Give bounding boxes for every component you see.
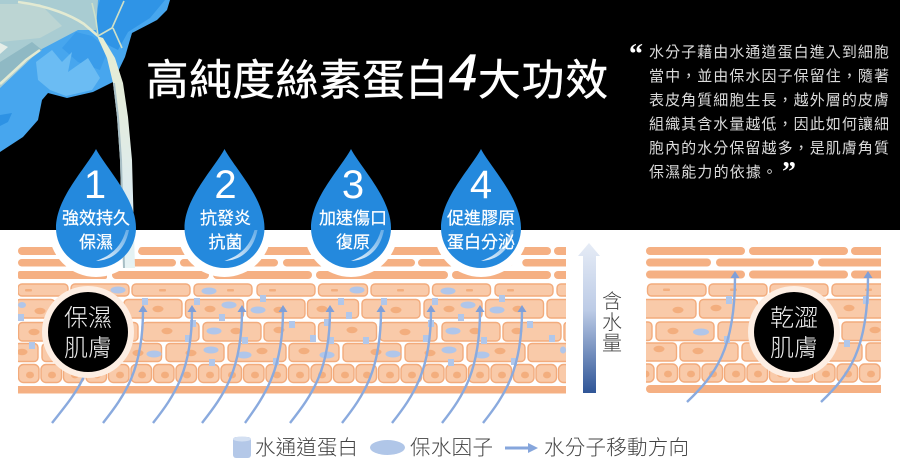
illustration: gloved hand pouring liquid from beaker <box>0 0 170 268</box>
skin diagram: dry skin <box>634 247 895 402</box>
legend label: moisture factor: 保水因子 <box>410 436 493 460</box>
droplet 1: long-lasting moisture <box>56 149 136 268</box>
water molecule arrows <box>687 271 872 402</box>
droplet 2: anti-inflammatory: 抗發炎 <box>200 209 251 228</box>
white halos under droplets <box>52 247 525 277</box>
title <box>146 44 608 105</box>
droplet 4: collagen secretion: 蛋白分泌 <box>447 233 515 252</box>
beaker <box>0 0 98 88</box>
body paragraph: 組織其含水量越低，因此如何讓細 <box>649 115 889 133</box>
droplet 4: collagen secretion: 促進膠原 <box>447 209 515 228</box>
droplet 3: wound healing: 復原 <box>336 233 370 252</box>
third cell row <box>18 322 572 341</box>
body paragraph: 當中，並由保水因子保留住，隨著 <box>649 68 889 85</box>
label: water content <box>602 290 622 355</box>
droplet 2: anti-inflammatory: 抗菌 <box>208 233 242 252</box>
clip cover for right edge <box>881 280 895 396</box>
beaker rims and glints <box>0 2 98 84</box>
legend icon: moisture factor <box>370 440 405 455</box>
stratum corneum layers <box>18 247 566 394</box>
droplet 1: long-lasting moisture: 保濕 <box>79 233 113 252</box>
badge: dry skin: 肌膚 <box>770 335 818 362</box>
closing quote mark: ” <box>782 157 796 188</box>
clip cover for left edge of cells <box>8 280 18 396</box>
badge: moisturized skin: 肌膚 <box>64 335 112 362</box>
black header band <box>0 0 900 230</box>
body paragraph: 保濕能力的依據。 <box>649 164 777 181</box>
glove lower shade <box>0 113 12 126</box>
basal cell row <box>18 364 570 382</box>
title: 4 <box>449 44 477 101</box>
title: 大功效 <box>478 58 608 105</box>
label: water content: 含 <box>602 290 622 313</box>
water channel proteins <box>724 296 869 347</box>
badge: moisturized skin: 保濕 <box>64 305 112 332</box>
body paragraph: 水分子藉由水通道蛋白進入到細胞 <box>649 44 889 61</box>
water content gradient arrow <box>578 243 600 393</box>
clip cover for left edge <box>634 280 646 396</box>
badge: dry skin <box>748 286 840 378</box>
moisture factors <box>18 286 566 358</box>
skin diagram: moisturized skin <box>8 247 576 423</box>
second cell row <box>16 300 571 318</box>
legend icon: water channel protein <box>233 436 251 458</box>
opening quote mark: “ <box>629 39 643 70</box>
label: water content: 水 <box>602 311 622 334</box>
stream shadow edge <box>113 83 125 268</box>
beaker lower shade <box>0 42 42 82</box>
droplet 3: wound healing <box>311 149 391 268</box>
glove upper fold <box>94 0 165 50</box>
droplet 1: long-lasting moisture: 強效持久 <box>62 209 130 228</box>
legend icon: arrow <box>505 443 538 453</box>
clip cover for right edge of cells <box>566 280 576 396</box>
body paragraph: 胞內的水分保留越多，是肌膚角質 <box>649 139 889 157</box>
droplet 2: anti-inflammatory <box>184 149 264 268</box>
flat cell row <box>18 284 571 296</box>
legend label: water channel protein: 水通道蛋白 <box>255 436 358 460</box>
body paragraph <box>649 44 889 181</box>
cell nuclei <box>16 289 551 378</box>
droplet 1: long-lasting moisture: 1 <box>84 163 106 207</box>
explanatory quote text <box>629 39 889 188</box>
glove centre fold <box>62 32 108 70</box>
cell rows <box>636 284 892 382</box>
body paragraph: 表皮角質細胞生長，越外層的皮膚 <box>649 91 889 109</box>
moisture factor <box>693 328 709 336</box>
title: 高純度絲素蛋白 <box>146 58 448 105</box>
droplet 4: collagen secretion <box>441 149 521 268</box>
droplet 3: wound healing: 加速傷口 <box>319 209 387 228</box>
beaker inner pale face <box>0 4 62 42</box>
badge: moisturized skin <box>42 286 134 378</box>
legend label: water movement direction: 水分子移動方向 <box>544 436 689 460</box>
liquid strands on lip <box>92 1 124 48</box>
beaker white glint <box>0 43 8 54</box>
water molecule arrows <box>52 305 526 423</box>
droplet 4: collagen secretion: 4 <box>470 163 492 207</box>
glove pale folds <box>36 50 100 96</box>
label: water content: 量 <box>602 333 622 355</box>
water channel proteins <box>18 295 555 366</box>
legend <box>233 436 689 460</box>
stratum corneum layers <box>646 247 881 393</box>
glove <box>0 0 170 152</box>
cell nuclei <box>642 288 880 377</box>
droplet 3: wound healing: 3 <box>342 163 364 207</box>
droplet 2: anti-inflammatory: 2 <box>214 163 237 207</box>
liquid stream <box>97 36 135 268</box>
badge: dry skin: 乾澀 <box>770 305 818 332</box>
fourth cell row <box>15 344 571 362</box>
